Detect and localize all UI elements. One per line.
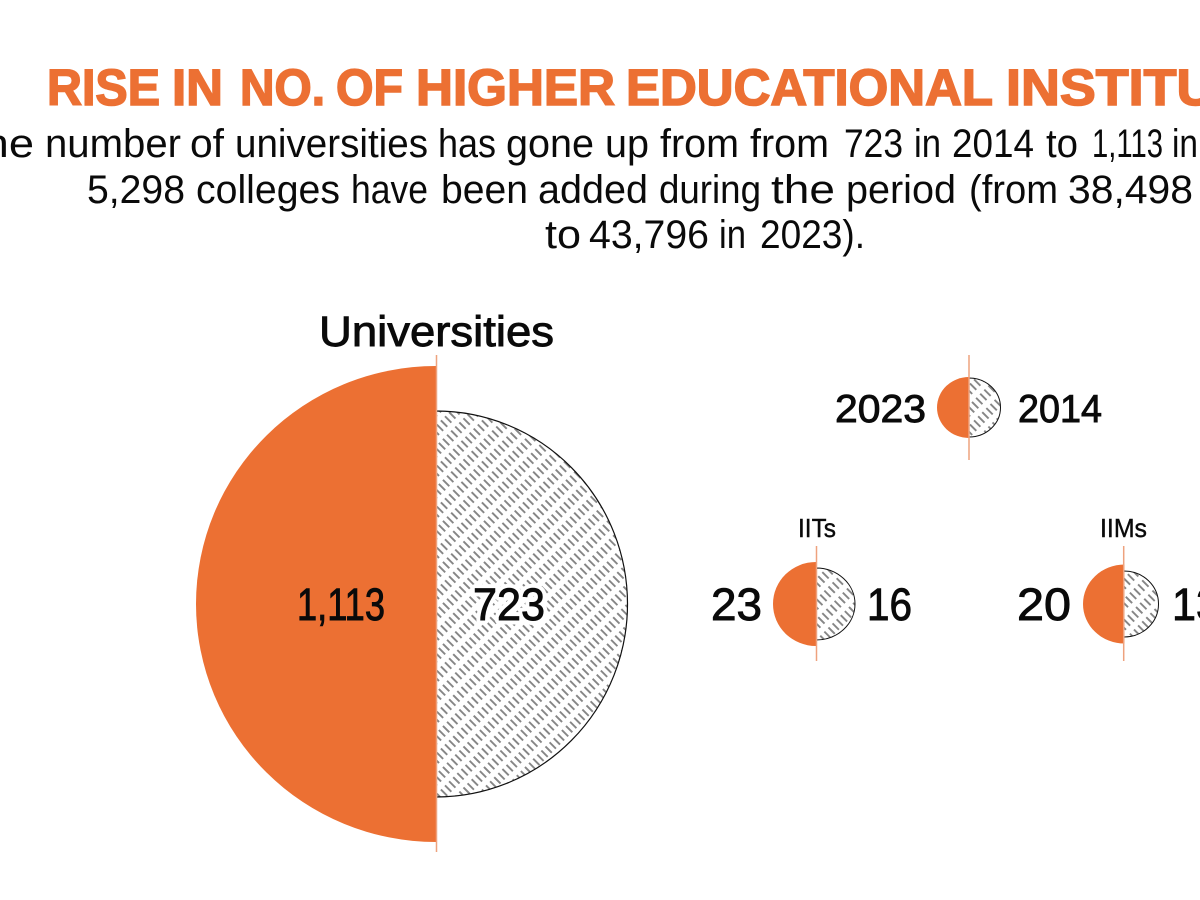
legend label 2023: 2023 <box>835 388 926 431</box>
value 723: 723 <box>473 579 545 630</box>
description text: of <box>190 122 225 166</box>
description text: period <box>846 168 956 212</box>
description text: 2014 <box>952 122 1034 166</box>
description text: during <box>659 168 761 212</box>
description text: in <box>719 213 746 257</box>
description text: from <box>660 122 739 166</box>
universities 2023 orange half circle <box>196 366 436 842</box>
description text: to <box>545 213 581 257</box>
description text: added <box>538 168 648 212</box>
legend hatched half circle <box>969 378 1000 437</box>
IITs 2014 hatched half circle <box>816 568 855 640</box>
description text: in <box>914 122 941 166</box>
description text: number <box>45 122 181 166</box>
description text: up <box>605 122 649 166</box>
title: EDUCATIONAL <box>626 59 993 116</box>
description text: the <box>771 168 835 212</box>
IIMs 2014 hatched half circle <box>1124 571 1158 637</box>
description text: 2023). <box>760 213 865 257</box>
value 16: 16 <box>867 579 912 630</box>
description text <box>0 122 1200 257</box>
IIMs heading: IIMs <box>1100 513 1147 543</box>
description text: from <box>750 122 829 166</box>
description text: has <box>438 122 496 166</box>
universities center line <box>436 355 438 852</box>
description text: been <box>441 168 528 212</box>
description text: 38,498 <box>1068 168 1193 212</box>
title <box>47 59 1200 116</box>
IIMs center line <box>1123 546 1125 661</box>
description text: 43,796 <box>589 213 709 257</box>
value 23: 23 <box>711 579 762 630</box>
IITs heading: IITs <box>798 513 836 543</box>
description text: colleges <box>196 168 340 212</box>
legend label 2014: 2014 <box>1018 388 1102 431</box>
chart: IITs <box>711 513 912 661</box>
chart: IIMs <box>1017 513 1200 661</box>
description text: (from <box>969 168 1058 212</box>
title: HIGHER <box>416 59 615 116</box>
title: OF <box>336 59 403 116</box>
value 1,113: 1,113 <box>297 579 385 630</box>
title: NO. <box>240 59 325 116</box>
legend <box>835 355 1102 460</box>
description text: 5,298 <box>87 168 185 212</box>
title: RISE <box>47 59 160 116</box>
description text: 1,113 <box>1092 122 1163 166</box>
legend center line <box>968 355 970 460</box>
universities 2014 hatched half circle <box>436 411 628 797</box>
IITs 2023 orange half circle <box>773 562 816 646</box>
description text: gone <box>506 122 594 166</box>
title: IN <box>172 59 223 116</box>
chart: universities <box>196 308 628 852</box>
IITs center line <box>816 546 818 661</box>
IIMs 2023 orange half circle <box>1083 564 1124 644</box>
description text: have <box>351 168 428 212</box>
description text: to <box>1046 122 1078 166</box>
description text: 723 <box>844 122 903 166</box>
white halo behind 723: 723 <box>473 579 545 630</box>
value 20: 20 <box>1017 579 1071 630</box>
universities heading: Universities <box>319 308 554 356</box>
description text: universities <box>235 122 428 166</box>
legend orange half circle <box>937 377 969 438</box>
